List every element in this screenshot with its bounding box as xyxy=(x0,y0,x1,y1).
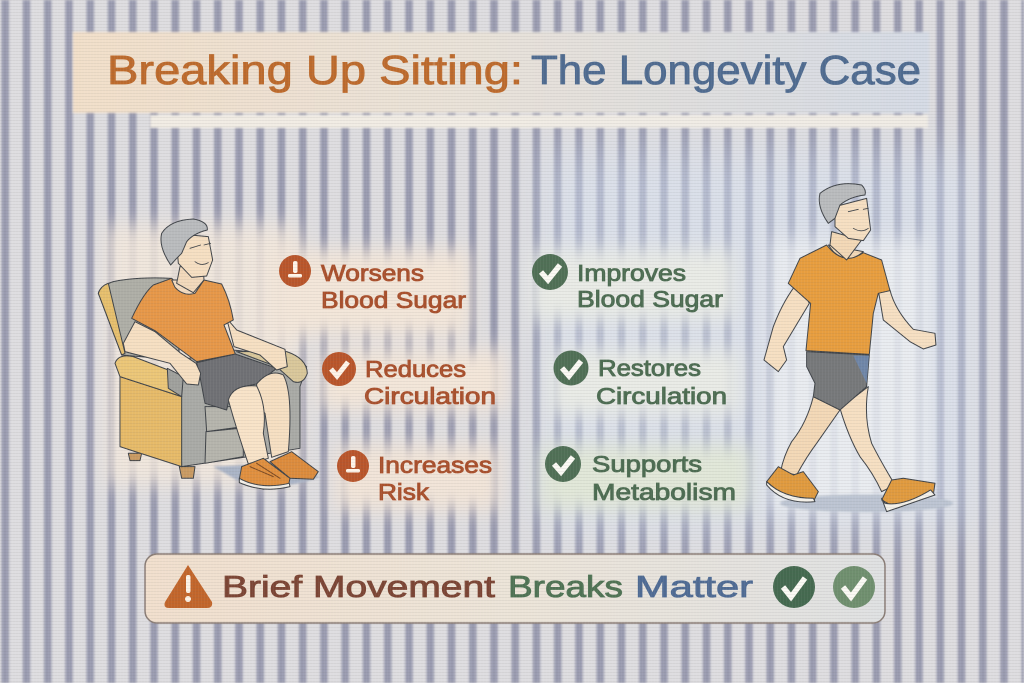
benefit item: supports metabolism: Supports xyxy=(592,451,702,477)
benefit item: supports metabolism: Metabolism xyxy=(592,479,736,505)
benefit item: restores circulation: Restores xyxy=(598,355,701,381)
risk item: increases risk: Increases xyxy=(378,452,492,478)
risk item: increases risk: Risk xyxy=(378,479,430,505)
callout text: Breaks xyxy=(508,569,623,604)
soft backdrop patches xyxy=(105,150,980,530)
seated man in armchair xyxy=(98,219,320,489)
benefit item: improves blood sugar: Improves xyxy=(577,260,686,286)
risk item: worsens blood sugar xyxy=(279,255,466,313)
left group: risks of sitting xyxy=(98,219,496,505)
callout text xyxy=(222,569,753,604)
risk item: worsens blood sugar: Blood Sugar xyxy=(321,287,466,313)
risk item: worsens blood sugar: Worsens xyxy=(321,260,424,286)
icon: dark check xyxy=(773,566,815,608)
callout bar xyxy=(145,554,885,623)
right group: benefits of walking xyxy=(532,184,953,512)
benefit item: improves blood sugar xyxy=(532,254,723,312)
benefit item: improves blood sugar: Blood Sugar xyxy=(577,286,723,312)
icon: warning triangle xyxy=(164,565,212,608)
callout text: Matter xyxy=(635,569,753,604)
benefit item: restores circulation: Circulation xyxy=(596,383,727,409)
benefit item: restores circulation xyxy=(554,350,727,409)
title: right part: The Longevity Case xyxy=(531,47,921,93)
benefit item: supports metabolism xyxy=(545,446,736,505)
title band xyxy=(73,32,929,128)
title: left part: Breaking Up Sitting: xyxy=(107,47,523,93)
icon: light check xyxy=(833,566,875,608)
walking man xyxy=(764,184,953,512)
risk item: reduces circulation: Circulation xyxy=(364,383,496,409)
callout text: Brief Movement xyxy=(222,569,495,604)
risk item: reduces circulation: Reduces xyxy=(365,356,466,382)
risk item: increases risk xyxy=(337,450,492,505)
risk item: reduces circulation xyxy=(322,352,496,409)
